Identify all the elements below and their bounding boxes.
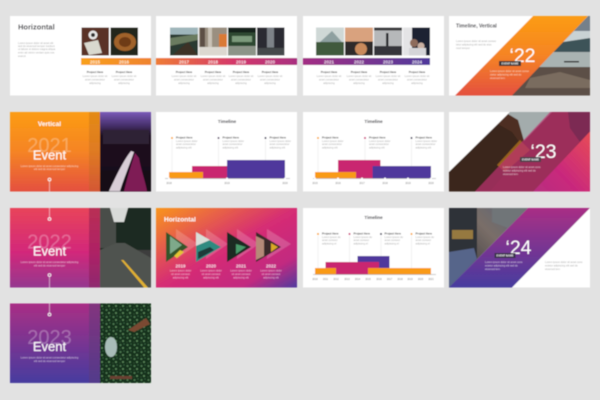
captions: amet consectetur xyxy=(85,78,105,82)
stepped bar chart: 2019 xyxy=(224,182,230,185)
text block: band text: Lorem ipsum dolor sit amet cons xyxy=(503,165,541,169)
years and captions: sit amet consect xyxy=(171,272,190,276)
year number 22: ‘22 xyxy=(510,45,536,67)
markers and captions: Project Here xyxy=(384,232,401,236)
markers and captions: adipiscing elit xyxy=(222,146,238,150)
arrow group 2021 xyxy=(227,229,259,262)
photo: coffee desk xyxy=(82,28,109,56)
stepped bar chart xyxy=(165,160,290,185)
years and captions: adipiscing elit xyxy=(173,276,189,280)
markers and captions: Lorem ipsum dolor xyxy=(369,139,391,143)
years and captions: adipiscing elit xyxy=(203,276,219,280)
text block: event text xyxy=(21,356,79,363)
captions: adipiscing xyxy=(118,81,130,85)
years and captions: sit amet consect xyxy=(232,272,251,276)
markers and captions: Lorem ipsum do xyxy=(416,235,435,239)
year band: 2018 xyxy=(208,59,219,64)
captions: adipiscing xyxy=(89,81,101,85)
photo: food dish xyxy=(110,28,138,56)
panel: vertical event 2022 xyxy=(10,208,151,288)
captions: Lorem ipsum dolor sit xyxy=(376,74,401,78)
text block: event text xyxy=(21,164,79,171)
captions xyxy=(317,70,430,85)
markers and captions: adipiscing el xyxy=(322,242,337,246)
markers and captions: Project Here xyxy=(222,136,239,140)
stepped bar chart: 2012 xyxy=(333,278,339,281)
captions: Lorem ipsum dolor sit xyxy=(172,74,197,78)
captions: Project Here xyxy=(205,70,222,74)
captions: amet consectetur xyxy=(349,78,369,82)
markers and captions: amet consect xyxy=(322,238,338,242)
forest at top right xyxy=(568,112,590,142)
text block: band text xyxy=(503,165,541,176)
captions: Lorem ipsum dolor sit xyxy=(201,74,226,78)
stepped bar chart: 2015 xyxy=(312,182,318,185)
markers and captions: Project Here xyxy=(322,232,339,236)
translucent pink band xyxy=(475,112,590,192)
stepped bar chart: 2016 xyxy=(335,182,341,185)
event name pill xyxy=(499,61,521,66)
label: Event: Event xyxy=(33,244,67,258)
text block: band text: ectetur adipiscing elit sed do xyxy=(503,168,536,172)
photo: glass dome xyxy=(316,28,344,56)
solid pink band xyxy=(533,132,590,192)
markers and captions: Lorem ipsum dolor xyxy=(270,139,291,143)
panel: horizontal timeline 2021-2024 xyxy=(303,16,444,96)
photo: lake xyxy=(511,16,590,96)
captions: adipiscing xyxy=(411,81,423,85)
years and captions: sit amet consect xyxy=(262,272,281,276)
photo: green foliage xyxy=(100,304,151,383)
year number 24: ‘24 xyxy=(506,237,532,259)
photo: forest xyxy=(449,112,590,192)
captions: Lorem ipsum dolor sit xyxy=(112,74,137,78)
year band: 2023 xyxy=(383,59,394,64)
captions: Project Here xyxy=(87,70,104,74)
stepped bar chart: 2010 xyxy=(312,278,318,281)
stepped bar chart xyxy=(312,256,436,281)
stepped bar chart: 2021 xyxy=(428,278,434,281)
stepped bar chart: 2015 xyxy=(365,278,371,281)
panel: timeline chart four bars xyxy=(303,208,444,288)
year band xyxy=(81,58,151,65)
year 2022: 2022 xyxy=(27,232,72,254)
captions: Project Here xyxy=(233,70,250,74)
year band xyxy=(303,58,430,65)
event name pill: EVENT NAME xyxy=(501,62,519,66)
photo: city light trails xyxy=(100,112,151,192)
years and captions: Lorem ipsum dolor xyxy=(230,268,252,272)
text block: intro: Lorem ipsum dolor sit amet elit xyxy=(18,41,54,45)
markers and captions: Project Here xyxy=(322,136,339,140)
captions xyxy=(83,70,137,85)
captions: Lorem ipsum dolor sit xyxy=(258,74,283,78)
markers and captions: Project Here xyxy=(176,136,193,140)
markers and captions: Project Here xyxy=(369,136,386,140)
panel: timeline chart three bars A xyxy=(156,112,297,192)
markers and captions: adipiscing elit xyxy=(176,146,192,150)
captions: adipiscing xyxy=(264,81,276,85)
text block: band text: ctetur adipiscing elit sed do xyxy=(490,72,522,76)
captions: adipiscing xyxy=(178,81,190,85)
markers and captions: adipiscing elit xyxy=(270,146,285,150)
year band: 2020 xyxy=(265,59,276,64)
arrow group 2022 xyxy=(256,229,291,262)
markers and captions xyxy=(317,136,437,172)
markers and captions: Project Here xyxy=(416,232,432,236)
captions: Project Here xyxy=(176,70,193,74)
text block: event text: elit sed do eiusmod tempor xyxy=(34,167,65,171)
captions: amet consectetur xyxy=(114,78,134,82)
text block: intro: sed do eiusmod tempor incidunt xyxy=(18,44,55,48)
heading: Timeline: Timeline xyxy=(364,119,383,124)
heading: Timeline: Timeline xyxy=(218,119,237,124)
text block: band text: ectetur adipiscing elit sed do xyxy=(485,264,518,268)
photo: green valley xyxy=(228,28,256,56)
markers and captions: amet consectetur xyxy=(222,142,243,146)
captions: amet consectetur xyxy=(260,78,280,82)
text block: right text: eiusmod tem xyxy=(545,267,560,271)
panel: diagonal event 23 xyxy=(449,112,590,192)
captions: adipiscing xyxy=(382,81,394,85)
markers and captions: amet consectetur xyxy=(176,142,196,146)
year 2023: 2023 xyxy=(27,327,72,349)
markers and captions: amet consectetur xyxy=(416,142,436,146)
photo: graffiti street xyxy=(449,208,528,288)
text block: description: mod tempor xyxy=(456,46,470,50)
heading: Vertical: Vertical xyxy=(38,121,61,128)
markers and captions: Project Here xyxy=(416,136,432,140)
photo: forest road xyxy=(100,208,151,288)
markers and captions: Lorem ipsum dolor xyxy=(176,139,198,143)
captions: Project Here xyxy=(409,70,426,74)
text block: right text xyxy=(545,260,583,271)
diagonal purple band xyxy=(449,208,590,288)
stepped bar chart: 2018 xyxy=(397,278,403,281)
text block: intro xyxy=(18,41,56,58)
captions: Lorem ipsum dolor sit xyxy=(347,74,372,78)
captions: Lorem ipsum dolor sit xyxy=(405,74,430,78)
captions xyxy=(172,70,283,85)
markers and captions: amet consect xyxy=(354,238,369,242)
text block: band text: eiusmod tem xyxy=(503,172,518,176)
markers and captions xyxy=(171,136,291,172)
year band xyxy=(156,58,297,65)
markers and captions: adipiscing el xyxy=(354,242,368,246)
year band: 2021 xyxy=(324,59,335,64)
text block: band text xyxy=(485,260,523,271)
text block: band text xyxy=(490,69,529,80)
year band: 2015 xyxy=(90,59,101,64)
event name pill: EVENT NAME xyxy=(496,254,514,258)
timeline node top xyxy=(48,208,51,220)
captions: amet consectetur xyxy=(203,78,223,82)
captions: amet consectetur xyxy=(407,78,427,82)
years and captions: Lorem ipsum dolor xyxy=(200,268,222,272)
stepped bar chart: 2016 xyxy=(376,278,382,281)
heading: Timeline, Vertical: Timeline, Vertical xyxy=(456,24,497,30)
panel: horizontal gradient arrows xyxy=(156,208,297,288)
stepped bar chart xyxy=(312,160,436,185)
years and captions: adipiscing elit xyxy=(263,276,279,280)
text block: band text: eiusmod tem xyxy=(485,267,500,271)
photo: canyon xyxy=(257,28,284,56)
markers and captions: adipiscing elit xyxy=(369,146,385,150)
markers and captions: Project Here xyxy=(270,136,286,140)
markers and captions xyxy=(317,232,435,268)
event name pill xyxy=(520,157,541,162)
text block: description: Lorem ipsum dolor sit amet consec xyxy=(456,39,497,43)
label: Event: Event xyxy=(33,148,67,162)
stepped bar chart: 2014 xyxy=(355,278,361,281)
text block: event text: elit sed do eiusmod tempor xyxy=(34,264,65,268)
captions: Lorem ipsum dolor sit xyxy=(229,74,254,78)
markers and captions: amet consectetur xyxy=(270,142,290,146)
text block: event text: Lorem ipsum dolor sit amet consectetur adipiscing xyxy=(21,356,79,360)
label: Event: Event xyxy=(33,339,67,354)
stepped bar chart: 2019 xyxy=(407,278,413,281)
text block: intro: ut labore et dolore magna aliqua xyxy=(18,47,56,51)
text block: band text: Lorem ipsum dolor sit amet cons xyxy=(485,260,523,264)
stepped bar chart: 2017 xyxy=(359,182,365,185)
captions: adipiscing xyxy=(207,81,219,85)
markers and captions: amet consectetur xyxy=(322,142,342,146)
arrow group 2020 xyxy=(196,229,228,262)
year number 23: ‘23 xyxy=(530,141,557,163)
stepped bar chart: 2020 xyxy=(418,278,424,281)
panel: timeline chart three bars B xyxy=(303,112,444,192)
stepped bar chart: 2017 xyxy=(387,278,393,281)
years and captions: Lorem ipsum dolor xyxy=(170,268,191,272)
captions: Project Here xyxy=(321,70,338,74)
stepped bar chart: 2020 xyxy=(282,182,288,185)
years and captions: 2019 xyxy=(175,264,186,268)
stepped bar chart: 2013 xyxy=(344,278,350,281)
photo overlay strip xyxy=(89,112,100,192)
captions: amet consectetur xyxy=(378,78,398,82)
markers and captions: Lorem ipsum do xyxy=(354,235,373,239)
arrow group 2019 xyxy=(166,229,198,262)
captions: Lorem ipsum dolor sit xyxy=(83,74,108,78)
photo: sunset river xyxy=(345,28,373,56)
text block: right text: ectetur adipiscing elit sed do xyxy=(545,264,578,268)
years and captions: Lorem ipsum dolor xyxy=(260,268,282,272)
year band: 2022 xyxy=(354,59,365,64)
markers and captions: Lorem ipsum dolor xyxy=(322,139,344,143)
timeline node top xyxy=(48,304,51,316)
timeline node bottom xyxy=(48,274,51,288)
photo: couple xyxy=(403,28,430,56)
photo: coast xyxy=(170,28,198,56)
captions: adipiscing xyxy=(353,81,365,85)
panel: timeline vertical 22 xyxy=(449,16,590,96)
captions: adipiscing xyxy=(235,81,247,85)
heading: Horizontal: Horizontal xyxy=(18,22,55,32)
stepped bar chart: 2020 xyxy=(428,182,434,185)
year band: 2016 xyxy=(119,59,130,64)
captions: Project Here xyxy=(380,70,397,74)
markers and captions: adipiscing el xyxy=(384,242,399,246)
stepped bar chart: 2019 xyxy=(405,182,411,185)
markers and captions: Lorem ipsum do xyxy=(384,235,404,239)
panel: horizontal timeline 2017-2020 xyxy=(156,16,297,96)
captions: Project Here xyxy=(116,70,133,74)
markers and captions: amet consect xyxy=(416,238,431,242)
captions: adipiscing xyxy=(323,81,335,85)
heading: Horizontal: Horizontal xyxy=(164,216,196,224)
markers and captions: amet consectetur xyxy=(369,142,389,146)
text block: band text: eiusmod tem xyxy=(490,76,505,80)
years and captions: adipiscing elit xyxy=(233,276,249,280)
captions: Lorem ipsum dolor sit xyxy=(317,74,342,78)
years and captions: 2022 xyxy=(266,264,277,268)
markers and captions: adipiscing elit xyxy=(322,146,338,150)
markers and captions: amet consect xyxy=(384,238,400,242)
event name pill: EVENT NAME xyxy=(522,158,539,162)
photo overlay strip xyxy=(89,208,100,288)
diagonal orange band xyxy=(455,16,588,96)
markers and captions: Lorem ipsum dolor xyxy=(222,139,244,143)
stepped bar chart: 2018 xyxy=(166,182,172,185)
text block: intro: enim ad minim veniam quis nos xyxy=(18,50,55,54)
year band: 2019 xyxy=(236,59,247,64)
year band: 2017 xyxy=(179,59,190,64)
timeline node xyxy=(48,178,51,192)
text block: event text xyxy=(21,260,79,268)
markers and captions: Project Here xyxy=(354,232,370,236)
stepped bar chart: 2018 xyxy=(382,182,388,185)
photo overlay strip xyxy=(89,304,100,383)
years and captions: 2020 xyxy=(206,264,217,268)
stepped bar chart: 2011 xyxy=(323,278,329,281)
panel: vertical event 2023 xyxy=(10,304,151,383)
event name pill xyxy=(494,253,516,258)
captions: amet consectetur xyxy=(174,78,194,82)
panel: horizontal timeline 2015-2016 xyxy=(10,16,151,96)
year band: 2024 xyxy=(412,59,423,64)
year 2021: 2021 xyxy=(27,135,72,157)
captions: Project Here xyxy=(351,70,368,74)
text block: event text: elit sed do eiusmod tempor xyxy=(34,359,65,363)
years and captions: 2021 xyxy=(236,264,247,268)
photo: hiker xyxy=(199,28,227,56)
text block: description: tetur adipiscing elit sed do eius xyxy=(456,42,492,46)
years and captions xyxy=(170,264,282,280)
markers and captions: Lorem ipsum do xyxy=(322,235,341,239)
captions: amet consectetur xyxy=(231,78,251,82)
markers and captions: adipiscing el xyxy=(416,242,430,246)
markers and captions: adipiscing elit xyxy=(416,146,431,150)
photo: pier figure xyxy=(374,28,402,56)
text block: right text: Lorem ipsum dolor sit amet cons xyxy=(545,260,583,264)
heading: Timeline: Timeline xyxy=(364,215,383,220)
text block: event text: Lorem ipsum dolor sit amet consectetur adipiscing xyxy=(21,260,79,264)
panel: diagonal event 24 xyxy=(449,208,590,288)
text block: event text: Lorem ipsum dolor sit amet consectetur adipiscing xyxy=(21,164,79,168)
captions: Project Here xyxy=(262,70,279,74)
panel: vertical event 2021 xyxy=(10,112,151,192)
text block: band text: Lorem ipsum dolor sit amet conse xyxy=(490,69,529,73)
years and captions: sit amet consect xyxy=(202,272,221,276)
text block: intro: exercit xyxy=(18,54,26,58)
captions: amet consectetur xyxy=(319,78,339,82)
text block: description xyxy=(456,39,497,50)
markers and captions: Lorem ipsum dolor xyxy=(416,139,437,143)
